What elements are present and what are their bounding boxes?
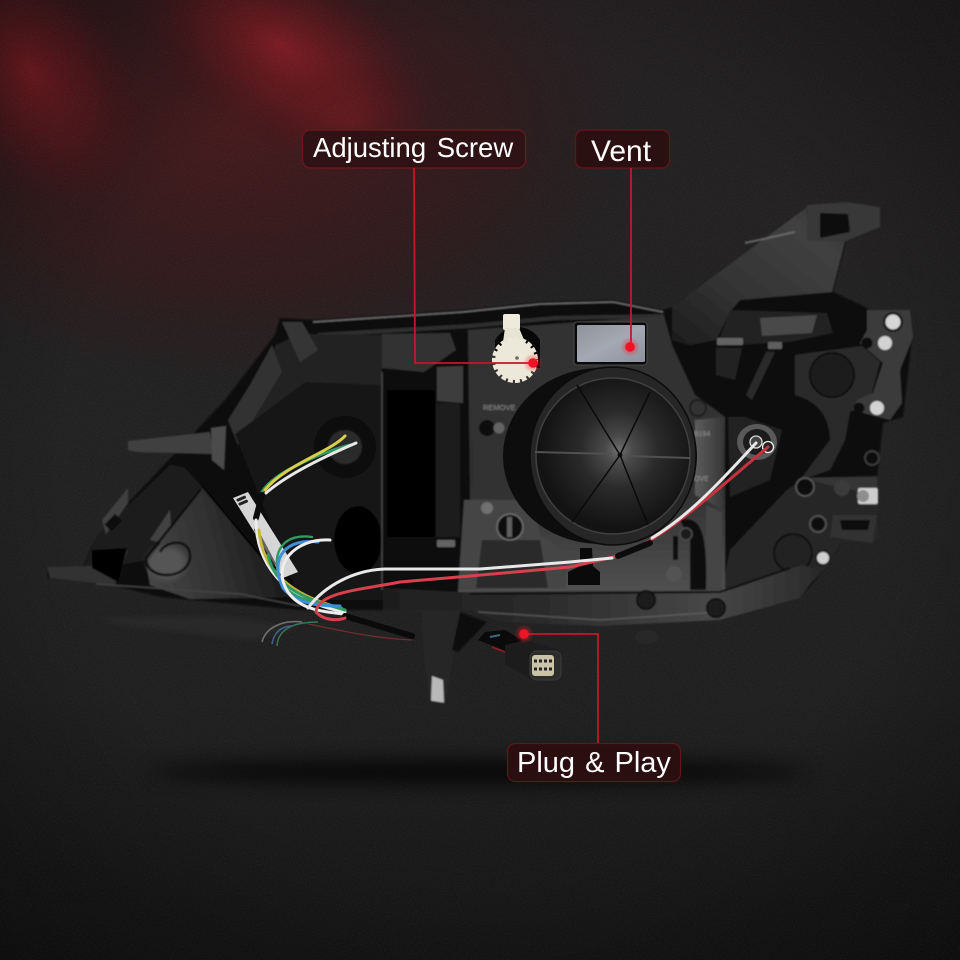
top wing fin xyxy=(672,207,845,345)
upper socket wires xyxy=(262,445,350,492)
callout: Vent xyxy=(576,130,670,357)
upper-left housing wall xyxy=(232,334,382,470)
bulb socket left xyxy=(314,416,376,478)
callout: Adjusting Screw: Adjusting Screw xyxy=(313,132,513,163)
long harness to right bulb xyxy=(316,556,618,612)
mould text: REMOVE xyxy=(483,403,516,412)
plug connector xyxy=(478,630,561,680)
right-of-dome pillar xyxy=(695,417,724,510)
shelf under wing xyxy=(717,310,833,346)
vent window xyxy=(574,322,647,365)
left tab and post xyxy=(128,432,213,454)
callout: Vent: Vent xyxy=(591,135,652,168)
left wing panel xyxy=(83,465,202,570)
housing shell: B194 xyxy=(694,431,710,438)
loom sleeve xyxy=(345,616,412,636)
right mid panel xyxy=(795,346,880,480)
right bracket xyxy=(852,310,913,420)
triangular panel xyxy=(146,487,293,599)
tape xyxy=(256,495,262,518)
upper top rim strip xyxy=(313,302,663,322)
lower mounting fin xyxy=(422,610,460,702)
barcode label xyxy=(233,492,298,578)
callout: Adjusting Screw xyxy=(302,130,543,373)
lower right body xyxy=(722,476,878,592)
floor reflection of headlight xyxy=(96,616,659,646)
descending wires xyxy=(256,520,345,612)
housing shell: OVE xyxy=(694,476,709,483)
harness: wires xyxy=(233,436,768,636)
centre-left chamber xyxy=(235,382,383,600)
callout: Plug & Play xyxy=(508,624,680,782)
headlight assembly xyxy=(47,202,913,703)
rear socket left lower xyxy=(334,506,382,574)
housing shell xyxy=(47,202,913,703)
black vertical box xyxy=(387,390,435,537)
adjusting screw gear xyxy=(494,314,540,381)
wire clip xyxy=(568,548,600,585)
left-of-dome pillar xyxy=(473,330,510,500)
central back plate xyxy=(458,316,725,592)
lower band xyxy=(383,565,820,626)
floor shadow band xyxy=(150,762,810,782)
housing silhouette xyxy=(47,202,912,626)
callout: Plug & Play: Plug & Play xyxy=(517,747,671,779)
round dust cap xyxy=(503,367,697,545)
bulb socket right xyxy=(737,424,777,460)
